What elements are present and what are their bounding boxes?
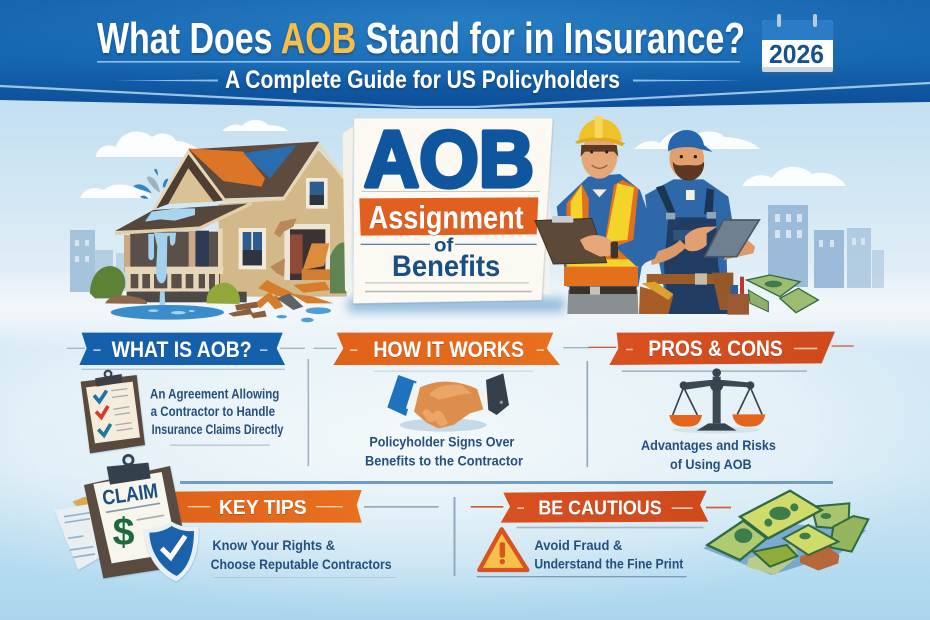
banner dashes bbox=[188, 506, 343, 507]
water puddle bbox=[111, 305, 224, 320]
banner dashes bbox=[350, 349, 544, 351]
banner title: HOW IT WORKS bbox=[373, 337, 524, 362]
banner underline bbox=[373, 371, 533, 372]
icon: claim clipboard: CLAIM bbox=[101, 479, 159, 510]
flanking lines bbox=[67, 348, 337, 349]
porch railing bbox=[125, 267, 223, 292]
icon: claim clipboard: $ bbox=[113, 510, 135, 554]
background skylines bbox=[70, 205, 884, 292]
panel: AOB title card bbox=[343, 115, 553, 303]
right forearm bbox=[723, 233, 755, 260]
tablet bbox=[705, 220, 759, 257]
money pile bbox=[747, 275, 818, 313]
foundation bbox=[127, 292, 247, 302]
vertical divider bbox=[454, 497, 456, 576]
overall bib and legs bbox=[664, 217, 728, 314]
vertical divider bbox=[308, 359, 309, 466]
banner underline bbox=[82, 369, 285, 370]
banner title: KEY TIPS bbox=[219, 497, 307, 519]
porch wall bbox=[130, 232, 220, 293]
thin rule bbox=[362, 190, 540, 193]
section: be cautious bbox=[471, 491, 868, 577]
description bbox=[641, 437, 776, 472]
pointing arm bbox=[650, 240, 687, 265]
porch posts bbox=[124, 228, 223, 272]
broken plaster bbox=[274, 218, 297, 237]
banner bbox=[609, 332, 835, 365]
flanking line bbox=[563, 347, 591, 348]
belt bbox=[647, 274, 732, 284]
clipboard bbox=[535, 218, 607, 264]
of flanking rules bbox=[361, 244, 537, 245]
banner title: BE CAUTIOUS bbox=[538, 497, 662, 519]
pants bbox=[567, 290, 638, 314]
dark gable underside bbox=[154, 150, 227, 209]
eyes and smile bbox=[590, 150, 608, 153]
porch roof bbox=[115, 203, 252, 231]
icon: warning triangle bbox=[479, 529, 527, 570]
banner underline bbox=[517, 527, 703, 528]
header band bbox=[0, 0, 930, 109]
front sheet bbox=[353, 118, 553, 303]
of: of bbox=[434, 235, 454, 256]
description rule bbox=[477, 576, 687, 577]
icon: claim clipboard bbox=[54, 455, 190, 578]
hard hat bbox=[579, 119, 622, 141]
description: Choose Reputable Contractors bbox=[211, 556, 392, 572]
icon: shield with check bbox=[144, 522, 199, 581]
illustration: damaged house bbox=[90, 142, 347, 322]
illustration: two contractors bbox=[535, 116, 818, 315]
upper window bbox=[306, 178, 328, 209]
banner bbox=[333, 333, 560, 365]
description: Policyholder Signs Over bbox=[369, 434, 515, 450]
description bbox=[534, 537, 684, 572]
right worker shirt bbox=[645, 179, 733, 314]
upper left gable bbox=[168, 168, 213, 204]
left worker shirt bbox=[557, 174, 660, 287]
description: Avoid Fraud & bbox=[534, 537, 622, 553]
banner bbox=[79, 333, 285, 365]
water splash bbox=[133, 169, 168, 199]
icon: handshake bbox=[387, 373, 509, 432]
banner title: PROS & CONS bbox=[648, 336, 783, 361]
description: Advantages and Risks bbox=[641, 437, 776, 453]
section: what is AOB bbox=[67, 333, 337, 453]
house walls bbox=[218, 150, 347, 297]
cap bbox=[668, 130, 713, 152]
description rule bbox=[213, 576, 396, 579]
overall straps bbox=[656, 185, 714, 214]
roof leak water bbox=[148, 233, 176, 308]
banner bbox=[501, 491, 708, 523]
back sheets bbox=[343, 127, 550, 297]
safety vest bbox=[565, 184, 589, 265]
worker left bbox=[535, 116, 660, 314]
description: An Agreement Allowing bbox=[150, 385, 279, 401]
right shrub bbox=[330, 243, 347, 293]
banner underline bbox=[622, 370, 807, 372]
flanking lines bbox=[588, 345, 854, 348]
main roof bbox=[188, 142, 319, 198]
vertical divider bbox=[586, 361, 588, 467]
description: Insurance Claims Directly bbox=[152, 421, 283, 437]
description: a Contractor to Handle bbox=[151, 403, 275, 419]
blue tarp bbox=[243, 145, 297, 178]
title: What Does AOB Stand for in Insurance? bbox=[97, 14, 745, 63]
lower window bbox=[239, 228, 266, 269]
banner dashes bbox=[517, 507, 693, 509]
subtitle flanking lines bbox=[113, 80, 745, 82]
icon: calendar 2026: 2026 bbox=[769, 39, 824, 69]
stones bbox=[105, 295, 147, 304]
head bbox=[669, 138, 704, 179]
beard bbox=[673, 162, 704, 181]
title divider line bbox=[97, 61, 740, 63]
doorway bbox=[284, 224, 330, 280]
water on porch roof bbox=[145, 208, 195, 222]
AOB heading: AOB bbox=[364, 115, 534, 204]
description: Know Your Rights & bbox=[212, 537, 335, 553]
debris pile bbox=[255, 280, 333, 309]
head bbox=[581, 133, 617, 179]
left arm bbox=[615, 217, 660, 267]
eyes bbox=[680, 155, 697, 158]
description bbox=[211, 537, 392, 572]
description: Understand the Fine Print bbox=[534, 556, 684, 572]
banner title: WHAT IS AOB? bbox=[112, 337, 252, 362]
section: pros and cons bbox=[588, 332, 854, 472]
flanking lines bbox=[471, 506, 731, 508]
background clouds bbox=[80, 120, 846, 198]
worker right bbox=[639, 130, 759, 315]
icon: checklist clipboard bbox=[81, 371, 145, 453]
card rules bbox=[365, 282, 532, 292]
lower horizontal rule bbox=[180, 481, 833, 484]
icon: pile of cash bbox=[703, 491, 868, 575]
broken door boards bbox=[303, 243, 329, 270]
banner bbox=[175, 490, 362, 523]
section: how it works bbox=[333, 333, 591, 469]
roof trim bbox=[154, 146, 344, 209]
Assignment: Assignment bbox=[369, 198, 524, 235]
description rule bbox=[170, 444, 270, 447]
section: key tips bbox=[54, 455, 439, 581]
description: of Using AOB bbox=[670, 456, 752, 472]
icon: balance scale bbox=[669, 368, 765, 433]
subtitle: A Complete Guide for US Policyholders bbox=[225, 66, 620, 94]
orange band bbox=[359, 197, 538, 236]
banner dashes bbox=[93, 349, 267, 351]
Benefits: Benefits bbox=[392, 250, 500, 283]
description bbox=[365, 434, 524, 469]
porch door bbox=[196, 231, 209, 267]
banner dashes bbox=[626, 348, 817, 350]
tool pouches bbox=[639, 287, 673, 314]
description: Benefits to the Contractor bbox=[365, 453, 524, 469]
shade under the card bbox=[348, 298, 565, 312]
orange roof panels bbox=[188, 148, 265, 187]
green bushes bbox=[90, 266, 125, 298]
icon: calendar 2026 bbox=[762, 14, 833, 72]
description bbox=[150, 385, 283, 437]
flanking line bbox=[364, 506, 439, 508]
